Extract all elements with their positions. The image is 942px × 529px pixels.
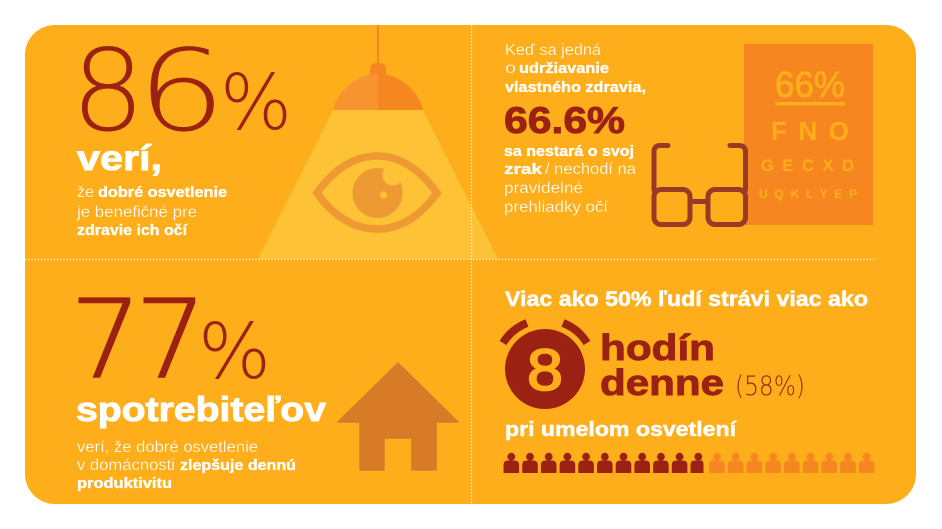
description: zlepšuje dennú (180, 457, 296, 474)
description (77, 439, 296, 492)
text: pri umelom osvetlení: pri umelom osvetlení (505, 419, 738, 441)
chart row 2: G E C X D (761, 157, 854, 175)
number 77: 7 (135, 278, 207, 403)
heading: spotrebiteľov: spotrebiteľov (76, 391, 326, 429)
icon: lamp with eye (258, 25, 498, 259)
explanation: prehliadky očí (504, 199, 609, 216)
stat: 86% believe (71, 25, 292, 239)
description: verí, že dobré osvetlenie (77, 439, 258, 456)
number 86: 6 (137, 25, 226, 157)
description: dobré osvetlenie (98, 184, 227, 201)
number 86 (71, 25, 226, 157)
description: je benefičné pre (76, 204, 197, 221)
percent sign: % (198, 308, 271, 397)
chart heading 66%: 66% (775, 64, 845, 105)
icon: alarm clock with 8 (503, 323, 587, 409)
number 77: 7 (70, 278, 142, 403)
explanation: zrak (504, 161, 543, 178)
pictogram: 11 of 20 people (504, 453, 874, 473)
intro text: o (505, 60, 516, 77)
intro text (505, 42, 646, 96)
intro text: udržiavanie (519, 60, 609, 77)
intro text: Keď sa jedná (505, 42, 601, 59)
heads highlighted (507, 453, 702, 461)
figure 66.6%: 66.6% (504, 100, 625, 141)
icon: alarm clock with 8: 8 (527, 338, 563, 403)
description: že (77, 184, 94, 201)
explanation: pravidelné (504, 180, 583, 197)
stat: 77% consumers (70, 278, 326, 492)
icon: house (338, 363, 458, 470)
percent sign: % (220, 59, 292, 148)
explanation (504, 143, 636, 216)
description: produktivitu (77, 475, 172, 492)
intro text: vlastného zdravia, (505, 79, 646, 96)
people highlighted (504, 460, 704, 473)
people remaining (709, 460, 874, 473)
explanation: sa nestará o svoj (504, 143, 634, 160)
description (76, 184, 227, 239)
chart row 1: F N O (771, 116, 849, 146)
description: v domácnosti (77, 457, 175, 474)
text: hodín denne (600, 327, 805, 403)
text: hodín denne: denne (600, 362, 724, 403)
heading: verí: verí, (77, 139, 162, 178)
icon: glasses (654, 146, 746, 224)
explanation: / nechodí na (545, 161, 636, 178)
description: zdravie ich očí (77, 222, 188, 239)
stat: eye care text (504, 42, 646, 216)
number 77 (70, 278, 207, 403)
icon: eye (317, 156, 437, 229)
chart row 3: U Q K L Y E P (759, 187, 857, 201)
heading: more than 50% of people: Viac ako 50% ľudí strávi viac ako (505, 288, 868, 311)
eye chart (744, 44, 873, 225)
number 86: 8 (71, 25, 145, 157)
heads remaining (713, 453, 870, 461)
text: hodín denne: hodín (600, 327, 715, 368)
percentage in brackets: (58%) (735, 371, 805, 402)
